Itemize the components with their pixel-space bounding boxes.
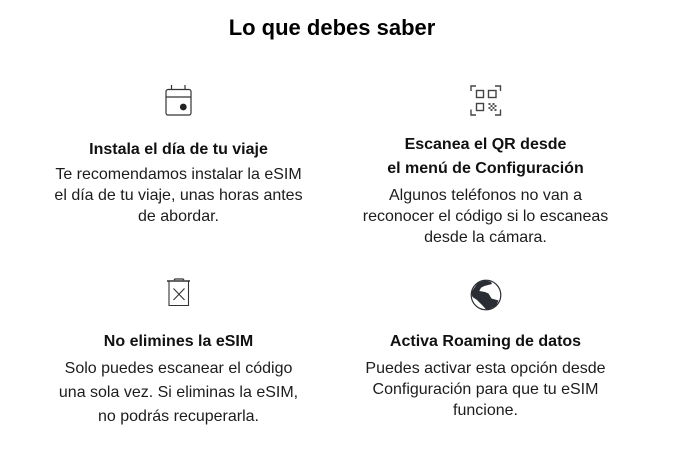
heading: escanea: [387, 136, 584, 177]
heading: roaming: Activa Roaming de datos: [390, 333, 581, 350]
text: escanea: reconocer el código si lo escaneas: [363, 208, 608, 225]
text: roaming: Configuración para que tu eSIM: [373, 381, 598, 398]
text: instala: el día de tu viaje, unas horas antes: [54, 187, 303, 204]
text: no elimines: Solo puedes escanear el código: [65, 360, 292, 377]
text: escanea: desde la cámara.: [424, 229, 547, 246]
heading: escanea: Escanea el QR desde: [405, 136, 566, 153]
heading: instala: Instala el día de tu viaje: [89, 141, 268, 158]
text: no elimines: una sola vez. Si eliminas la eSIM,: [59, 384, 298, 401]
heading: no elimines: No elimines la eSIM: [104, 333, 253, 350]
text: instala: de abordar.: [138, 208, 219, 225]
title: Lo que debes saber: [229, 15, 435, 40]
text: escanea: Algunos teléfonos no van a: [389, 187, 582, 204]
text: instala: [54, 166, 303, 225]
icon: calendar: [165, 85, 192, 116]
text: no elimines: no podrás recuperarla.: [98, 408, 259, 425]
icon: QR code: [470, 85, 502, 116]
icon: globe: [470, 280, 502, 310]
text: no elimines: [59, 360, 298, 425]
text: roaming: [365, 360, 606, 419]
heading: escanea: el menú de Configuración: [387, 160, 584, 177]
text: roaming: Puedes activar esta opción desde: [365, 360, 606, 377]
text: escanea: [363, 187, 608, 246]
icon: trash with cross: [167, 278, 190, 306]
text: instala: Te recomendamos instalar la eSIM: [55, 166, 302, 183]
text: roaming: funcione.: [453, 402, 518, 419]
